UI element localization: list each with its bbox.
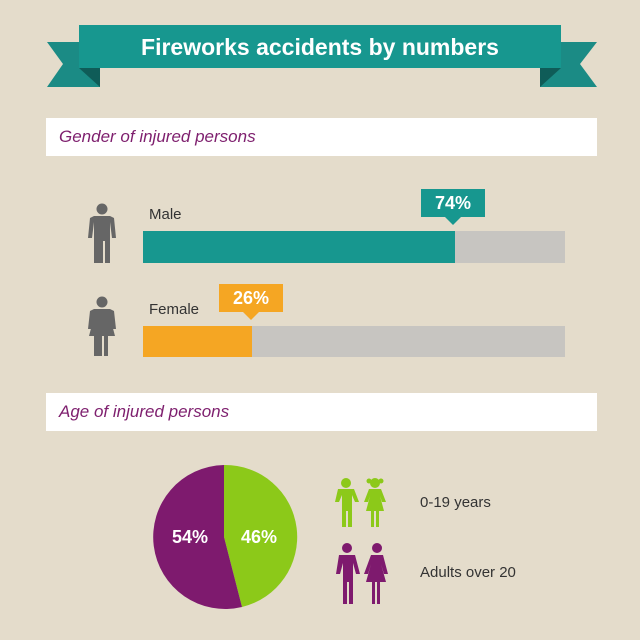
title ribbon [47, 25, 597, 87]
icon: adults [336, 543, 388, 604]
label: female: Female [149, 301, 199, 318]
bar: female [143, 326, 565, 357]
icon: male [88, 204, 116, 263]
pie chart [153, 465, 298, 609]
icon: children [335, 478, 386, 527]
pie chart: 46% [241, 527, 277, 547]
callout: 74% [421, 189, 485, 225]
label: adults: Adults over 20 [420, 564, 516, 581]
pie chart: 54% [172, 527, 208, 547]
bar: male [143, 231, 565, 263]
label: male: Male [149, 206, 182, 223]
heading: age [46, 393, 597, 431]
callout: 26% [219, 284, 283, 320]
heading: age: Age of injured persons [59, 402, 229, 421]
callout: 74%: 74% [435, 193, 471, 213]
icon: female [88, 296, 116, 356]
title text: Fireworks accidents by numbers [141, 34, 499, 60]
callout: 26%: 26% [233, 288, 269, 308]
label: 0-19: 0-19 years [420, 494, 491, 511]
heading: gender [46, 118, 597, 156]
heading: gender: Gender of injured persons [59, 127, 256, 146]
